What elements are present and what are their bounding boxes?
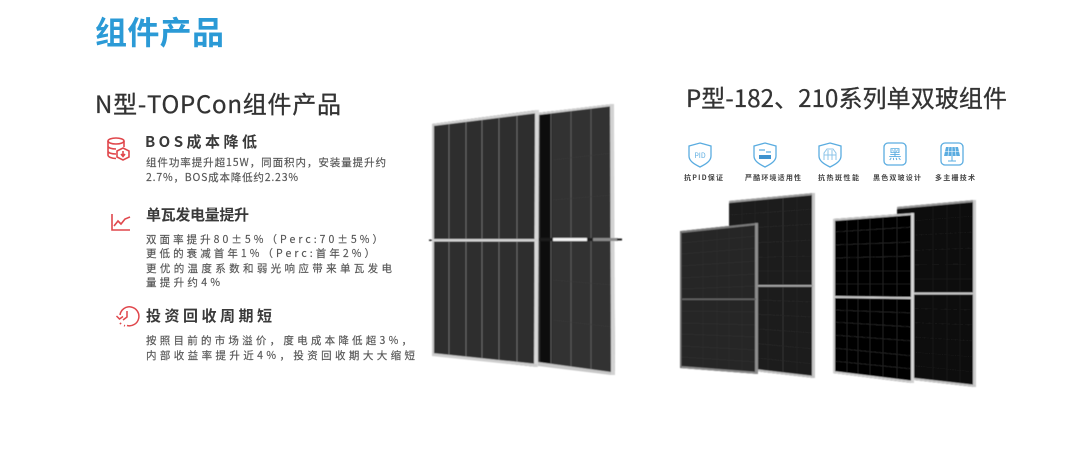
label: 抗热斑性能: 抗热斑性能 <box>818 173 859 183</box>
label: 严酷环境适用性: 严酷环境适用性 <box>745 173 801 183</box>
icon: line chart <box>112 214 130 230</box>
icon: black double glass <box>873 143 921 183</box>
text: payback description: 按照目前的市场溢价，度电成本降低超3%， <box>146 333 412 348</box>
rear black module <box>897 195 976 390</box>
P-type panels, left pair <box>680 190 815 380</box>
panel: BOS cost reduction <box>108 131 386 185</box>
rear gray-frame module <box>729 190 815 380</box>
icon: anti PID shield <box>684 143 723 183</box>
label: 抗PID保证: 抗PID保证 <box>684 173 723 183</box>
icon: harsh environment shield <box>745 143 801 183</box>
text: payback description: 内部收益率提升近4%，投资回收期大大缩短 <box>146 348 416 363</box>
title: 组件产品 <box>95 8 224 54</box>
panel: payback period <box>116 305 416 363</box>
text: payback description <box>146 333 416 363</box>
label: 多主栅技术: 多主栅技术 <box>935 173 975 183</box>
front dark-frame module <box>680 220 758 375</box>
P-type feature icons <box>684 143 975 183</box>
label: 黑色双玻设计: 黑色双玻设计 <box>873 173 921 183</box>
heading: 投资回收周期短: 投资回收周期短 <box>146 305 272 326</box>
icon: anti PID shield: PID <box>694 151 706 161</box>
heading: 单瓦发电量提升: 单瓦发电量提升 <box>146 204 249 225</box>
text: power generation description <box>146 232 392 290</box>
text: BOS description: 组件功率提升超15W，同面积内，安装量提升约 <box>146 155 386 170</box>
icon: black double glass: 黑 <box>888 144 902 163</box>
text: power generation description: 更低的衰减首年1%（Perc:首年2%） <box>146 246 375 261</box>
rear N-type module <box>538 100 622 380</box>
front black module <box>833 210 914 385</box>
heading: BOS成本降低: BOS成本降低 <box>145 131 257 152</box>
front N-type module <box>429 100 539 370</box>
icon: anti hot spot shield <box>818 143 859 183</box>
text: power generation description: 量提升约4% <box>146 275 220 290</box>
icon: clock <box>116 307 139 326</box>
text: BOS description: 2.7%，BOS成本降低约2.23% <box>146 170 298 185</box>
P-type panels, right pair <box>833 195 976 390</box>
icon: multi busbar solar panel <box>935 143 975 183</box>
heading: P型-182、210系列单双玻组件: P型-182、210系列单双玻组件 <box>686 79 1007 114</box>
heading: N型-TOPCon组件产品: N型-TOPCon组件产品 <box>95 85 341 120</box>
text: power generation description: 更优的温度系数和弱光响应带来单瓦发电 <box>146 261 392 276</box>
panel: power generation per watt <box>112 204 392 290</box>
text: BOS description <box>146 155 386 185</box>
icon: database with down arrow <box>108 138 129 160</box>
N-type panels image <box>429 100 622 380</box>
text: power generation description: 双面率提升80±5%（Perc:70±5%） <box>146 232 383 247</box>
